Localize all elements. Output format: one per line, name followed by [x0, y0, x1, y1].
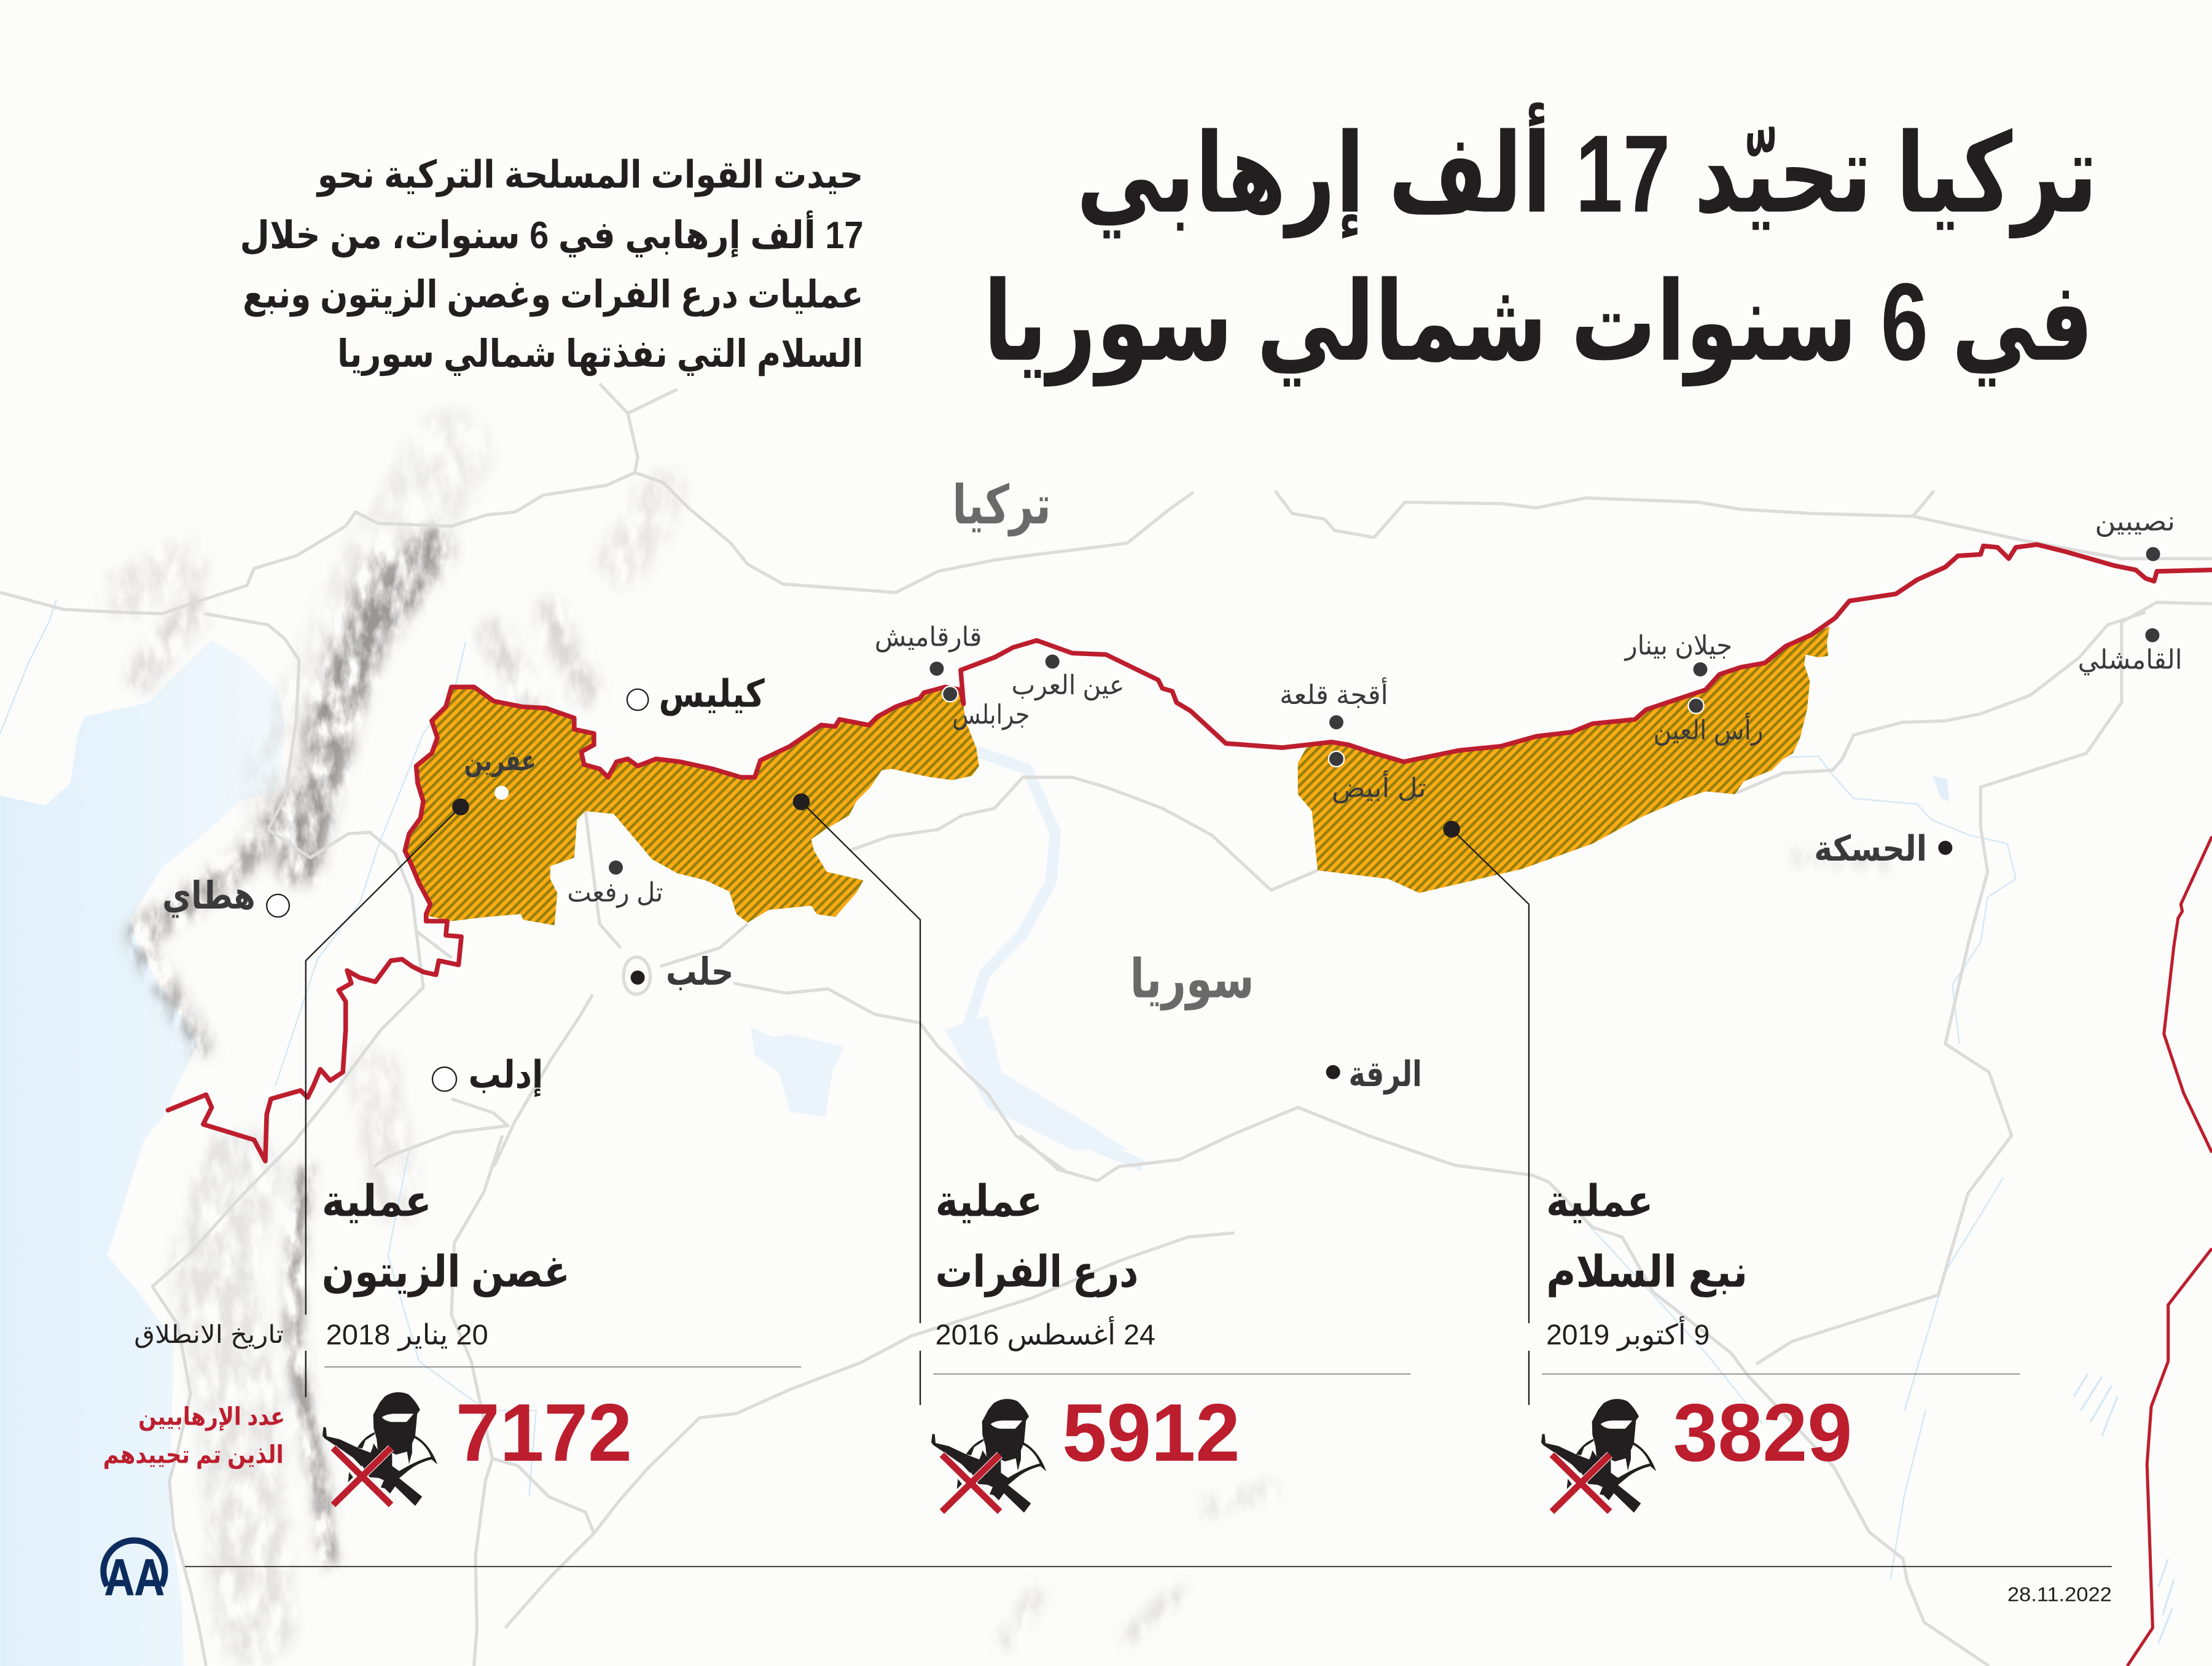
title: في 6 سنوات شمالي سوريا [983, 260, 2093, 387]
town: Tell Abyad [1329, 751, 1426, 804]
row label: number neutralized: عدد الإرهابيين [138, 1402, 285, 1431]
count: 5912 [1062, 1387, 1240, 1479]
city: Kilis [627, 673, 765, 716]
town: Ras al-Ayn [1653, 698, 1764, 746]
icon: neutralized fighter [322, 1392, 437, 1506]
date stamp: 28.11.2022 [2007, 1583, 2112, 1605]
label: Syria: سوريا [1130, 950, 1254, 1011]
leader: Peace Spring [1443, 821, 1529, 1405]
town: Qamishli [2078, 628, 2183, 675]
heading [936, 1177, 1138, 1297]
count: 3829 [1673, 1387, 1852, 1479]
intro text: السلام التي نفذتها شمالي سوريا [337, 333, 864, 377]
intro text: حيدت القوات المسلحة التركية نحو [316, 154, 864, 197]
town: Ras al-Ayn: رأس العين [1653, 712, 1764, 746]
roads [0, 384, 2212, 1666]
date: 24 أغسطس 2016 [936, 1316, 1155, 1351]
Syria-Iraq border [2127, 837, 2212, 1666]
heading: نبع السلام [1546, 1248, 1748, 1297]
town: Tell Abyad: تل أبيض [1332, 770, 1426, 804]
date: 20 يناير 2018 [326, 1318, 488, 1351]
town: Akcakale: أقجة قلعة [1280, 677, 1388, 710]
heading: درع الفرات [936, 1248, 1138, 1297]
heading [322, 1177, 570, 1297]
leader: Olive Branch [306, 799, 469, 1398]
heading [1546, 1177, 1748, 1297]
region: Peace Spring area [1298, 627, 1830, 893]
intro text [240, 154, 864, 377]
city: Hatay: هطاي [162, 875, 256, 918]
panel: Operation Olive Branch [322, 1177, 801, 1506]
title [983, 102, 2098, 387]
city: Afrin: عفرين [464, 745, 536, 777]
lakes and rivers [0, 600, 2174, 1643]
city: Aleppo: حلب [666, 951, 733, 993]
town: Jarabulus: جرابلس [952, 700, 1030, 730]
title: تركيا تحيّد 17 ألف إرهابي [1076, 102, 2098, 238]
heading: عملية [1546, 1177, 1653, 1226]
date: 9 أكتوبر 2019 [1546, 1316, 1710, 1351]
city: Hasakah: الحسكة [1814, 829, 1927, 869]
city: Idlib: إدلب [469, 1054, 543, 1097]
town: Akcakale [1280, 677, 1388, 729]
city: Afrin [464, 745, 536, 800]
intro text: 17 ألف إرهابي في 6 سنوات، من خلال [240, 210, 864, 257]
heading: عملية [936, 1177, 1042, 1226]
panel: Operation Euphrates Shield [931, 1177, 1411, 1512]
city: Idlib [432, 1054, 543, 1097]
city: Raqqa [1326, 1055, 1422, 1095]
town: Karkamis: قارقاميش [875, 623, 982, 653]
town: Nusaybin [2095, 507, 2175, 561]
town: Tell Rifaat [567, 861, 663, 908]
city: Aleppo [631, 951, 733, 993]
panel: Operation Peace Spring [1541, 1177, 2020, 1512]
town: Karkamis [875, 623, 982, 676]
count: 7172 [456, 1387, 632, 1479]
label: Turkey: تركيا [952, 475, 1051, 536]
town: Qamishli: القامشلي [2078, 645, 2183, 675]
leader: Euphrates Shield [793, 793, 920, 1405]
AA logo: AA [104, 1548, 165, 1606]
town: Nusaybin: نصيبين [2095, 507, 2175, 537]
row label: number neutralized [103, 1402, 285, 1469]
city: Kilis: كيليس [659, 673, 765, 716]
town: Ceylanpinar [1624, 632, 1732, 676]
heading: غصن الزيتون [322, 1248, 570, 1297]
town: Ayn al-Arab [1012, 655, 1124, 701]
town: Ayn al-Arab: عين العرب [1012, 671, 1124, 701]
sea [0, 641, 285, 1666]
town: Ceylanpinar: جيلان بينار [1624, 632, 1732, 662]
town: Jarabulus [942, 686, 1030, 730]
city: Raqqa: الرقة [1348, 1055, 1422, 1095]
Syria-Turkey border [168, 544, 2212, 1161]
row label: start date: تاريخ الانطلاق [134, 1321, 284, 1349]
icon: neutralized fighter [1541, 1399, 1656, 1512]
region: Olive Branch and Euphrates Shield areas [405, 687, 979, 925]
row label: number neutralized: الذين تم تحييدهم [103, 1441, 284, 1469]
heading: عملية [322, 1177, 432, 1226]
icon: neutralized fighter [931, 1399, 1046, 1512]
terrain relief [127, 452, 1890, 1642]
intro text: عمليات درع الفرات وغصن الزيتون ونبع [243, 274, 864, 317]
town: Tell Rifaat: تل رفعت [567, 878, 663, 908]
